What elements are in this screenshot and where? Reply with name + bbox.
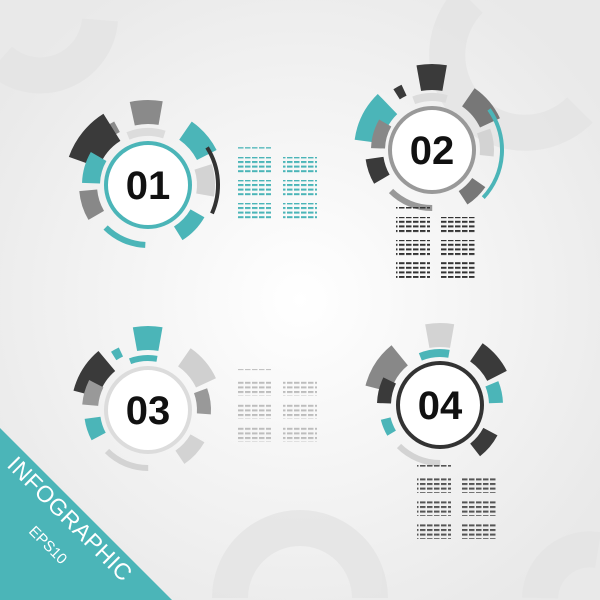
text 04 xyxy=(417,465,496,539)
block 04 xyxy=(351,316,529,539)
wheel 01 xyxy=(52,89,244,281)
text 03 xyxy=(237,369,317,442)
block 01 xyxy=(52,89,317,281)
text 02 xyxy=(396,206,475,278)
wheel 04 xyxy=(351,316,529,494)
block 03 xyxy=(59,321,317,499)
banner title: INFOGRAPHIC xyxy=(2,451,138,586)
wheel 02 xyxy=(335,53,529,247)
number 03: 03 xyxy=(126,389,170,433)
corner banner xyxy=(0,428,172,600)
number 01: 01 xyxy=(126,164,170,208)
banner subtitle: EPS10 xyxy=(25,523,70,568)
number 04: 04 xyxy=(418,384,463,428)
block 02 xyxy=(335,53,529,278)
number 02: 02 xyxy=(410,129,454,173)
text 01 xyxy=(237,146,317,219)
wheel 03 xyxy=(59,321,237,499)
